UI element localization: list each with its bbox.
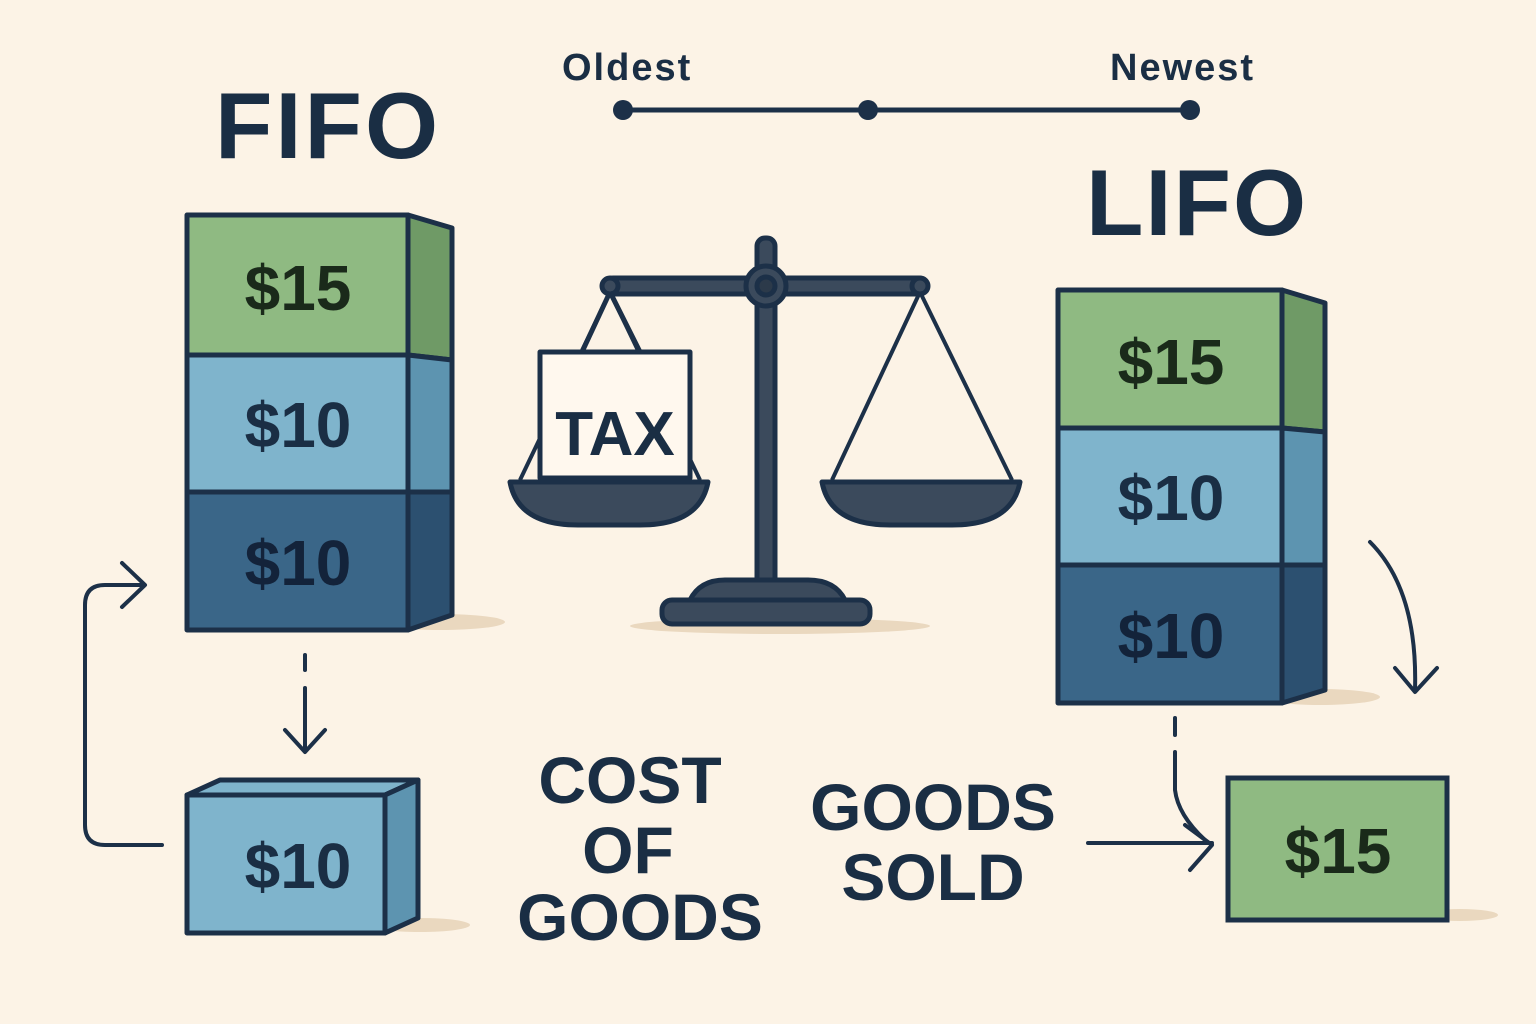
FIFO sold box: $10 [245,830,351,902]
LIFO arrows [1088,542,1437,870]
FIFO stack: $10 [245,389,351,461]
timeline: Oldest [562,47,692,89]
timeline [562,47,1255,120]
label: cost of goods [517,743,763,954]
FIFO sold box [187,780,470,933]
label: cost of goods: COST [538,743,722,817]
LIFO sold box [1228,778,1498,921]
label: cost of goods: OF [582,813,674,887]
label: cost of goods: GOODS [517,880,763,954]
title: LIFO: LIFO [1086,150,1308,255]
FIFO arrows [85,563,325,845]
scale with tax [510,238,1020,634]
LIFO stack: $10 [1118,600,1224,672]
LIFO stack [1058,290,1380,705]
scale with tax: TAX [555,400,675,469]
LIFO stack: $15 [1118,326,1224,398]
FIFO stack: $15 [245,252,351,324]
label: goods sold: GOODS [810,770,1056,844]
label: goods sold: SOLD [841,840,1025,914]
LIFO stack: $10 [1118,462,1224,534]
timeline: Newest [1110,47,1255,89]
LIFO sold box: $15 [1285,815,1391,887]
FIFO stack [187,215,505,630]
label: goods sold [810,770,1056,914]
FIFO stack: $10 [245,527,351,599]
title: FIFO: FIFO [215,73,441,178]
